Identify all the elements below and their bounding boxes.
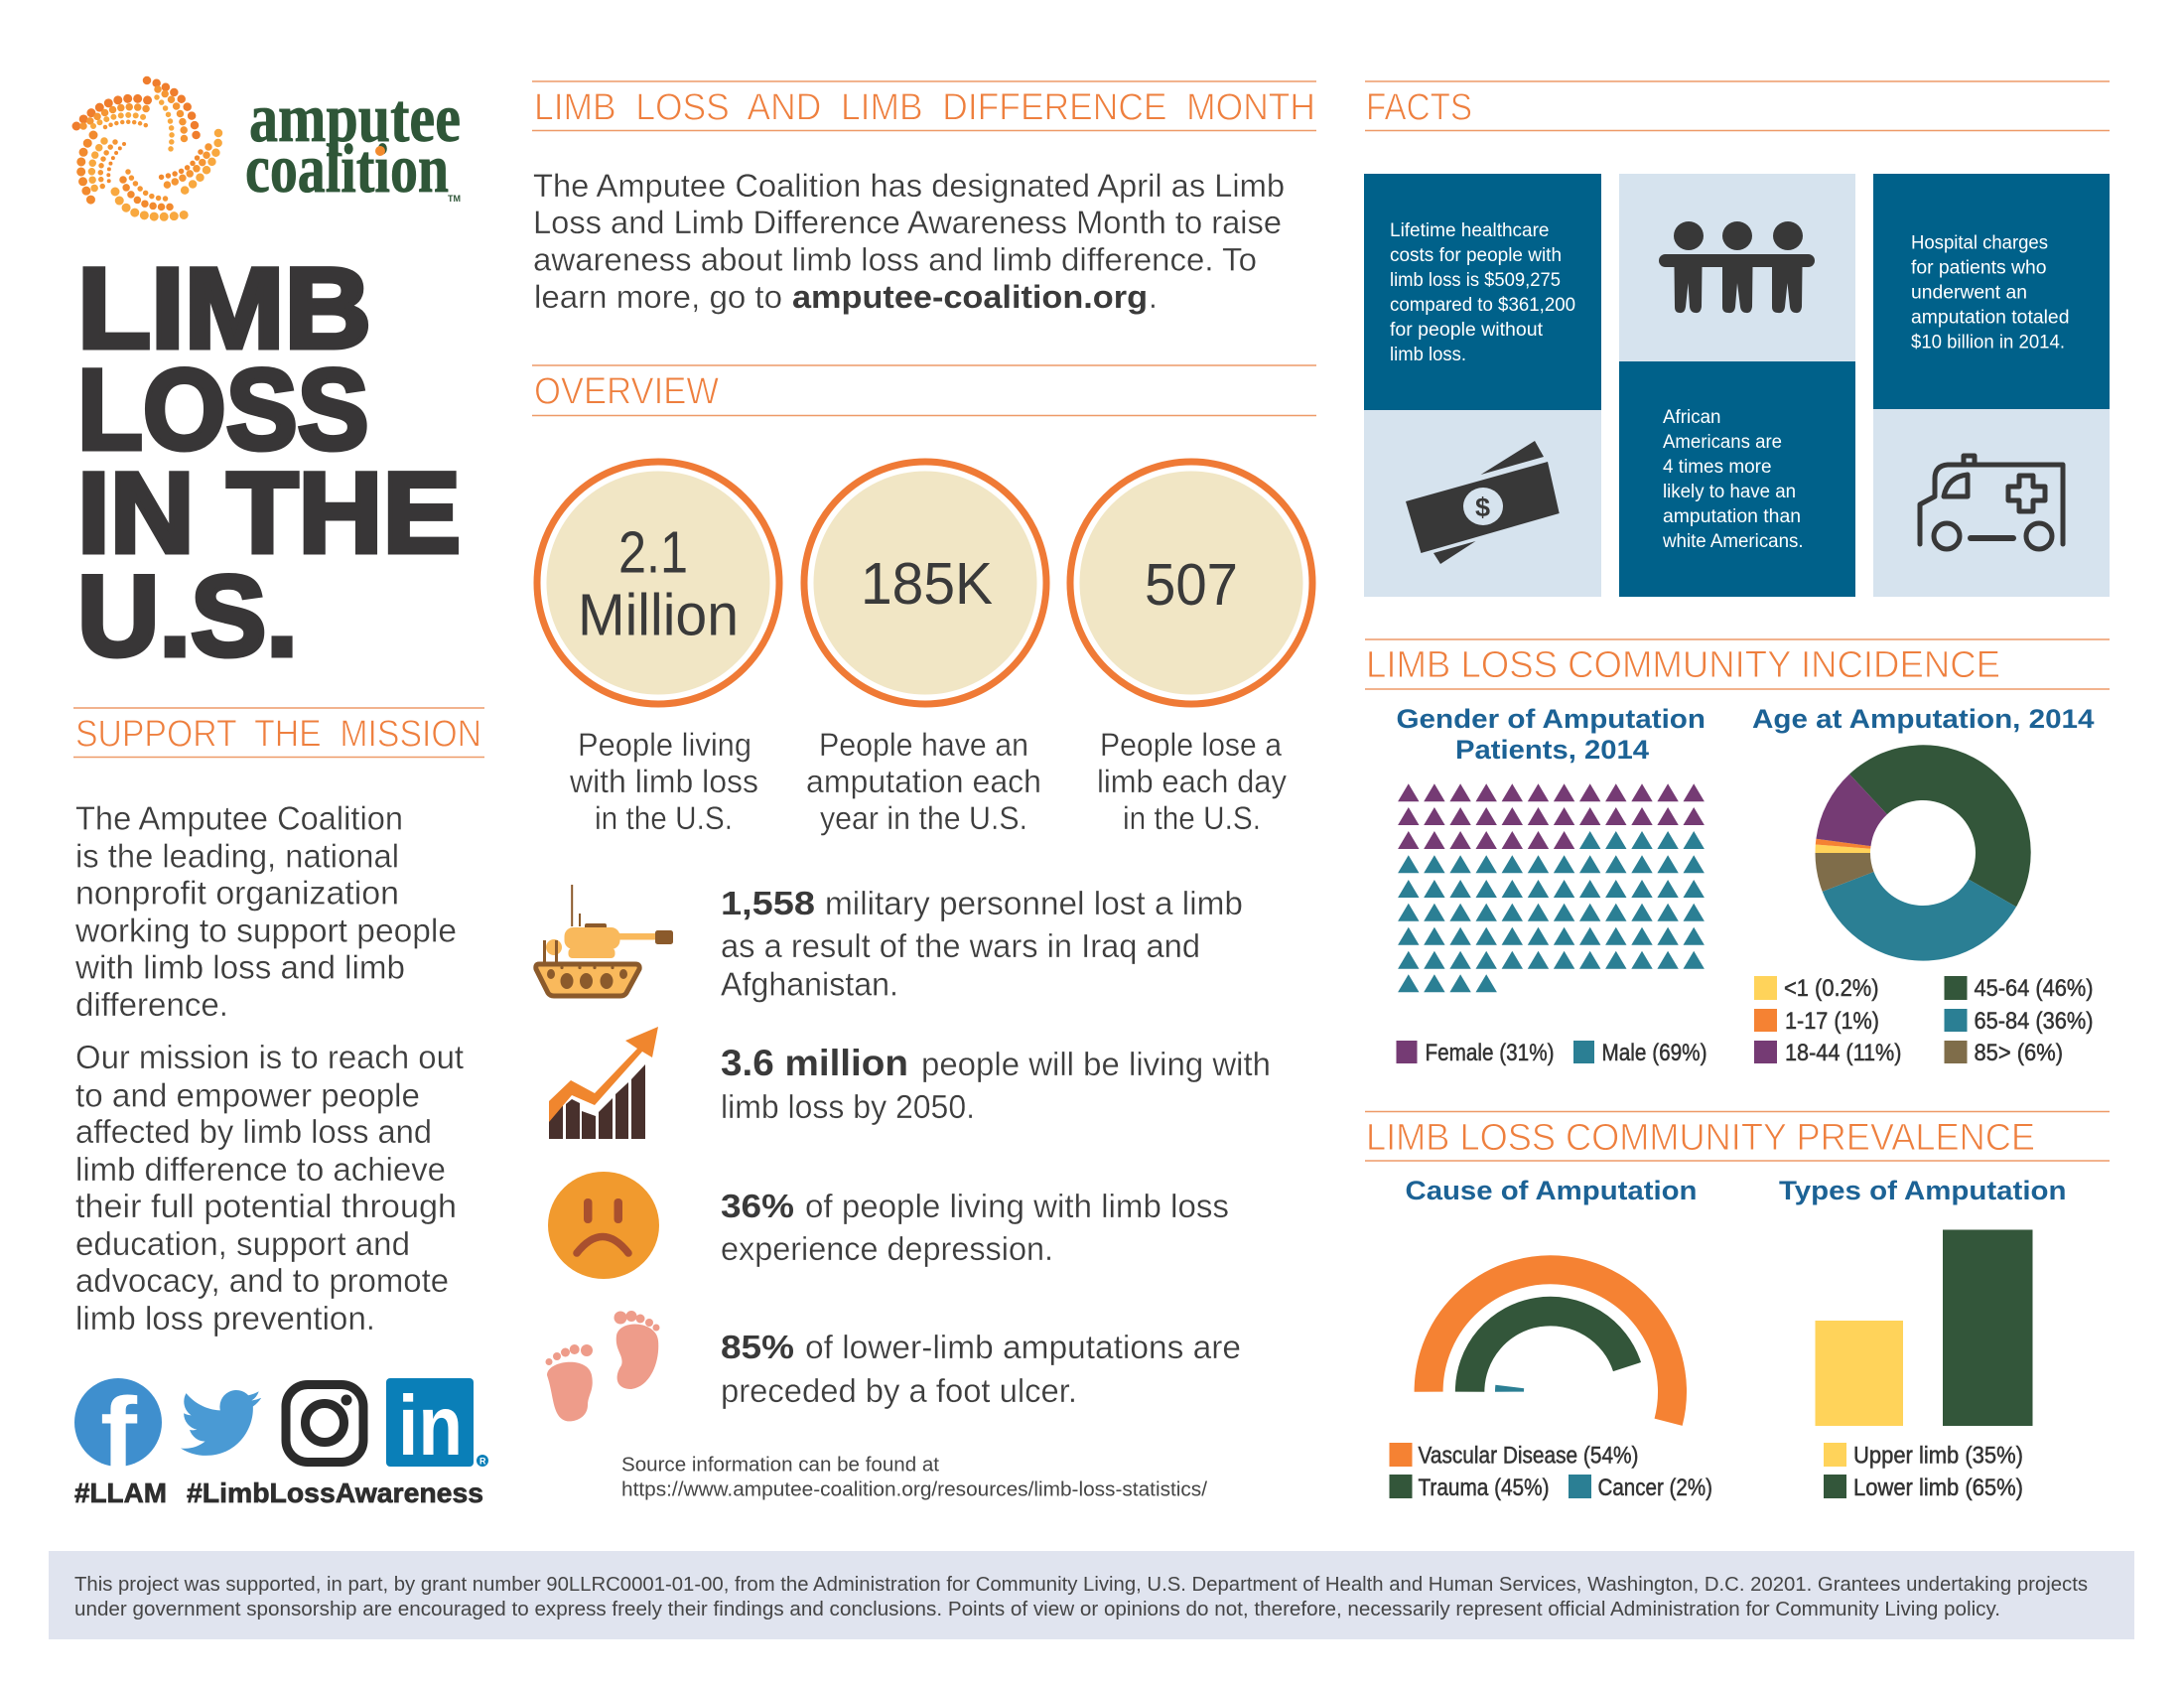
legend: cause: Vascular Disease (54%): [1418, 1442, 1638, 1470]
fact text: lifetime costs: for people without: [1390, 320, 1544, 341]
title: IN THE: [77, 450, 461, 577]
stat: foot ulcer: [721, 1329, 1241, 1409]
icon: tank: [536, 885, 673, 996]
stat circle: 507: 507: [1145, 552, 1238, 618]
logo wordmark: amputee: [249, 80, 461, 157]
bar lower limb: [1943, 1229, 2033, 1426]
footer: funding disclaimer: under government sponsorship are encouraged to express freely their findings and conclusions. Points of view or opinions do not, therefore, necessarily represent official Administration for Community Living policy.: [74, 1599, 2000, 1620]
legend: age: 1-17 (1%): [1785, 1008, 1879, 1035]
icon: facebook: [74, 1377, 162, 1488]
fact text: hospital charges: amputation totaled: [1911, 308, 2069, 328]
icon: sad face: [548, 1172, 659, 1279]
circle caption: limb each day: limb each day: [1097, 764, 1287, 799]
legend: cause: Trauma (45%): [1418, 1475, 1549, 1501]
fact text: 4 times more likely: Americans are: [1663, 432, 1782, 453]
source note: Source information can be found at: [621, 1454, 939, 1476]
legend: types: Upper limb (35%): [1853, 1442, 2023, 1470]
stat: depression: experience depression.: [721, 1230, 1053, 1267]
fact text: 4 times more likely: likely to have an: [1663, 482, 1796, 502]
bar upper limb: [1815, 1321, 1903, 1426]
text block: mission: affected by limb loss and: [75, 1113, 432, 1150]
fact text: lifetime costs: limb loss.: [1390, 345, 1466, 365]
source note: https://www.amputee-coalition.org/resources/limb-loss-statistics/: [621, 1479, 1207, 1501]
heading: facts: FACTS: [1366, 87, 1472, 129]
footer: funding disclaimer: This project was supported, in part, by grant number 90LLRC0001-01-00, from the Administration for Community Living, U.S. Department of Health and Human Services, Washington, D.C. 20201. Grantees undertaking projects: [74, 1574, 2088, 1596]
heading: limb loss community prevalence: LIMB LOSS COMMUNITY PREVALENCE: [1366, 1117, 2035, 1159]
hashtags: #LimbLossAwareness: [187, 1477, 483, 1508]
stat: military personnel: [721, 885, 1243, 1003]
chart heading: cause: Cause of Amputation: [1406, 1176, 1698, 1205]
hashtags: #LLAM: [74, 1477, 167, 1508]
text block: awareness month: [533, 168, 1285, 315]
stat: military personnel: military personnel lost a limb: [825, 885, 1243, 921]
title: [77, 245, 461, 680]
icon: linkedin: in: [398, 1379, 463, 1474]
stat circle: 2.1 million: Million: [578, 582, 739, 647]
fact text: hospital charges: [1911, 232, 2069, 353]
radial gauge chart: cause of amputation: [1429, 1270, 1672, 1422]
legend: age: <1 (0.2%): [1784, 975, 1878, 1002]
legend: gender: Female (31%): [1426, 1040, 1555, 1066]
icon: facebook: f: [100, 1377, 138, 1488]
circle caption: living with limb loss: with limb loss: [569, 764, 758, 799]
text block: mission: limb loss prevention.: [75, 1300, 375, 1336]
icon: footprints: [546, 1311, 659, 1421]
stat circle: 507: [1070, 462, 1312, 704]
fact text: 4 times more likely: African: [1663, 407, 1721, 428]
stat: depression: 36%: [721, 1188, 794, 1224]
arc trauma: [1470, 1312, 1627, 1392]
circle caption: living with limb loss: People living: [578, 727, 751, 763]
chart heading: gender: Gender of Amputation: [1396, 704, 1706, 734]
icon: twitter: [181, 1390, 261, 1456]
circle caption: limb each day: [1097, 727, 1287, 836]
fact text: 4 times more likely: white Americans.: [1662, 531, 1804, 552]
heading: limb loss community incidence: LIMB LOSS COMMUNITY INCIDENCE: [1366, 644, 2000, 686]
text block: mission: is the leading, national: [75, 838, 399, 874]
footer: funding disclaimer: [49, 1551, 2134, 1639]
logo wordmark: [245, 80, 461, 208]
title: LIMB: [77, 245, 371, 372]
source note: [621, 1454, 1207, 1501]
segment 85 and over: [1815, 853, 1874, 892]
fact text: hospital charges: for patients who: [1911, 258, 2047, 278]
stat circle: 185K: [804, 462, 1046, 704]
stat circle: 2.1 million: [537, 462, 779, 704]
stat: military personnel: 1,558: [721, 885, 815, 921]
circle caption: amputation each year: amputation each: [806, 764, 1041, 799]
female triangles: [1398, 783, 1705, 849]
icon: linkedin: R: [479, 1456, 486, 1466]
text block: mission: education, support and: [75, 1225, 410, 1262]
male triangles: [1398, 831, 1705, 992]
text block: awareness month: .: [1149, 279, 1158, 315]
text block: mission: difference.: [75, 986, 228, 1023]
fact text: lifetime costs: [1390, 220, 1575, 365]
logo wordmark: coalition: [245, 131, 449, 208]
icon: ambulance: [1920, 456, 2063, 549]
segment 45-64: [1849, 745, 2031, 907]
segment 18-44: [1816, 774, 1887, 846]
chart heading: gender: [1396, 704, 1706, 765]
legend: cause: Cancer (2%): [1598, 1475, 1712, 1501]
icon: instagram: [286, 1384, 363, 1462]
fact text: hospital charges: $10 billion in 2014.: [1911, 332, 2065, 353]
text block: awareness month: learn more, go to: [534, 279, 782, 315]
title: U.S.: [77, 553, 298, 680]
heading: overview: OVERVIEW: [534, 371, 719, 413]
logo wordmark: TM: [448, 194, 461, 204]
bar chart: types of amputation: [1815, 1229, 2033, 1426]
stat: 3.6 million by 2050: [721, 1043, 1271, 1125]
stat: foot ulcer: 85%: [721, 1329, 794, 1365]
fact text: lifetime costs: costs for people with: [1390, 245, 1562, 266]
legend: age: 85> (6%): [1974, 1040, 2063, 1066]
stat: depression: of people living with limb loss: [805, 1188, 1229, 1224]
panel: African Americans fact: [1619, 174, 1855, 597]
fact text: lifetime costs: compared to $361,200: [1390, 295, 1575, 316]
segment under 1: [1815, 844, 1870, 853]
text block: awareness month: The Amputee Coalition has designated April as Limb: [533, 168, 1285, 204]
panel: healthcare costs fact: [1364, 174, 1601, 597]
circle caption: limb each day: People lose a: [1100, 727, 1282, 763]
legend: types: Lower limb (65%): [1853, 1475, 2023, 1501]
stat: military personnel: Afghanistan.: [721, 965, 898, 1003]
segment 1-17: [1816, 839, 1870, 849]
logo: Amputee Coalition: [76, 80, 461, 216]
text block: mission: with limb loss and limb: [74, 949, 405, 985]
legend: age: 45-64 (46%): [1974, 975, 2093, 1002]
fact text: lifetime costs: limb loss is $509,275: [1390, 270, 1561, 291]
logo swirl of dots: [76, 80, 218, 216]
arc cancer: [1495, 1386, 1524, 1392]
fact text: 4 times more likely: 4 times more: [1663, 457, 1771, 478]
text block: awareness month: awareness about limb loss and limb difference. To: [533, 242, 1257, 278]
text block: mission: nonprofit organization: [75, 874, 399, 912]
circle caption: amputation each year: People have an: [819, 727, 1028, 763]
stat circle: 2.1 million: 2.1: [618, 520, 688, 586]
stat: foot ulcer: preceded by a foot ulcer.: [721, 1372, 1077, 1409]
fact text: hospital charges: Hospital charges: [1911, 232, 2048, 254]
text block: mission: [74, 800, 464, 1336]
text block: mission: The Amputee Coalition: [75, 800, 403, 836]
chart heading: gender: Patients, 2014: [1455, 735, 1649, 765]
text block: mission: to and empower people: [75, 1076, 420, 1114]
icon: money: [1406, 441, 1560, 564]
stat circle: 185K: 185K: [861, 551, 993, 617]
text block: mission: advocacy, and to promote: [75, 1262, 449, 1299]
legend: gender: Male (69%): [1602, 1040, 1707, 1066]
stat: military personnel: as a result of the wars in Iraq and: [721, 927, 1200, 964]
icon: money: $: [1475, 492, 1490, 522]
chart heading: types: Types of Amputation: [1779, 1176, 2067, 1205]
circle caption: living with limb loss: in the U.S.: [595, 800, 733, 836]
chart heading: age: Age at Amputation, 2014: [1752, 704, 2095, 734]
fact text: 4 times more likely: [1662, 407, 1804, 552]
heading: support the mission: SUPPORT THE MISSION: [75, 713, 481, 755]
stat: depression: [721, 1188, 1229, 1267]
title: LOSS: [77, 347, 369, 474]
stat: 3.6 million by 2050: people will be living with: [921, 1046, 1271, 1082]
legend: age: 18-44 (11%): [1785, 1040, 1902, 1066]
fact text: 4 times more likely: amputation than: [1663, 506, 1801, 527]
circle caption: living with limb loss: [569, 727, 758, 836]
text block: mission: limb difference to achieve: [75, 1151, 446, 1188]
panel: hospital charges fact: [1873, 174, 2110, 597]
stat: 3.6 million by 2050: limb loss by 2050.: [721, 1088, 975, 1125]
text block: mission: their full potential through: [75, 1188, 457, 1224]
stat: foot ulcer: of lower-limb amputations are: [805, 1329, 1241, 1365]
legend: age: 65-84 (36%): [1974, 1008, 2093, 1035]
text block: mission: working to support people: [74, 912, 457, 949]
segment 65-84: [1823, 872, 2016, 961]
fact text: hospital charges: underwent an: [1911, 282, 2027, 304]
pictogram chart: gender: [1398, 783, 1705, 992]
circle caption: limb each day: in the U.S.: [1123, 800, 1261, 836]
icon: rising chart: [549, 1027, 658, 1139]
legend: age: [1754, 975, 2093, 1066]
text block: awareness month: amputee-coalition.org: [792, 279, 1148, 315]
legend: types: [1824, 1442, 2023, 1501]
legend: gender: [1396, 1040, 1707, 1066]
legend: cause: [1390, 1442, 1712, 1501]
icon: three people: [1659, 221, 1815, 313]
circle caption: amputation each year: year in the U.S.: [820, 800, 1027, 836]
heading: limb loss and limb difference month: LIMB LOSS AND LIMB DIFFERENCE MONTH: [534, 87, 1315, 129]
fact text: lifetime costs: Lifetime healthcare: [1390, 220, 1549, 241]
donut chart: age at amputation: [1815, 745, 2031, 961]
circle caption: amputation each year: [806, 727, 1041, 836]
text block: awareness month: Loss and Limb Difference Awareness Month to raise: [533, 205, 1282, 240]
arc vascular disease: [1429, 1270, 1672, 1422]
stat: 3.6 million by 2050: 3.6 million: [721, 1043, 908, 1083]
text block: mission: Our mission is to reach out: [75, 1039, 464, 1075]
